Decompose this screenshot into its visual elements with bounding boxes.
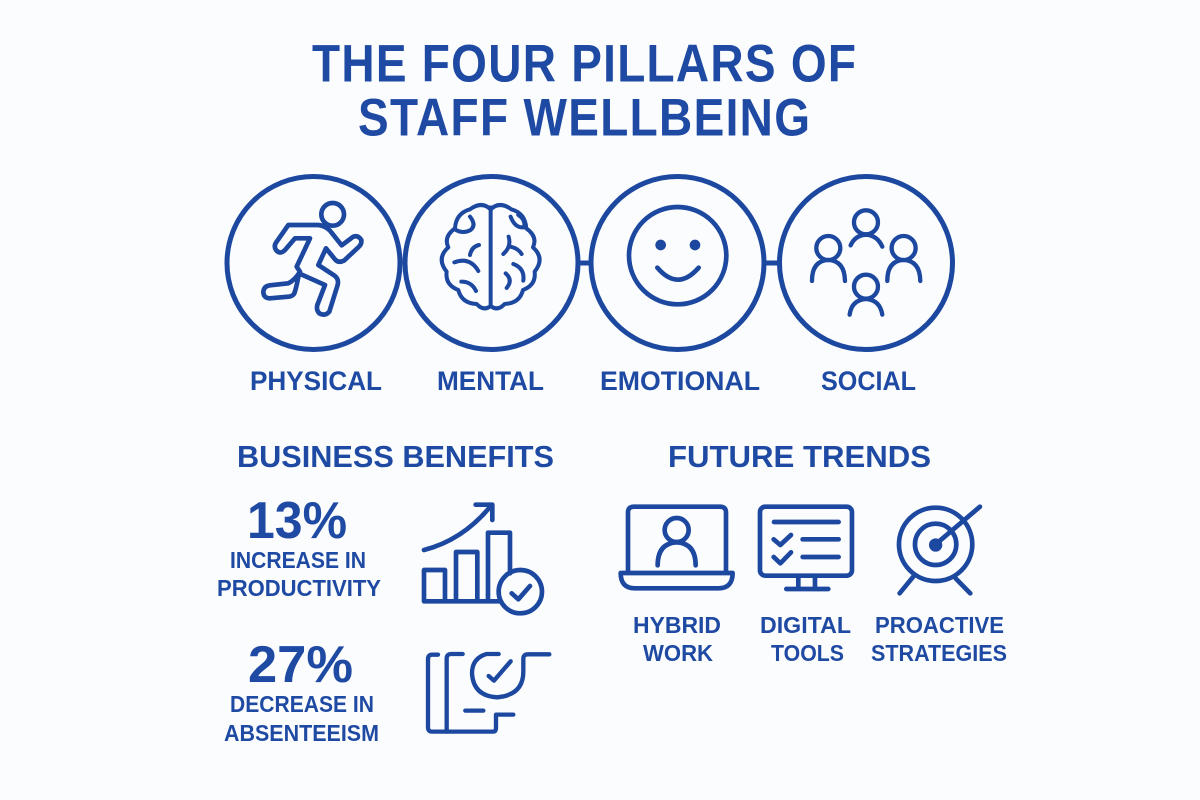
icon: group of people <box>812 210 920 315</box>
stat: absenteeism: DECREASE IN <box>230 691 374 717</box>
heading: business benefits: BUSINESS BENEFITS <box>237 439 554 474</box>
pillar labels: MENTAL <box>437 366 544 396</box>
stat: absenteeism: 27% <box>248 636 353 694</box>
trend label: proactive strategies <box>871 612 1007 666</box>
icon: target with arrow <box>899 507 980 593</box>
stat: absenteeism: ABSENTEEISM <box>224 720 379 746</box>
trend label: hybrid work: HYBRID <box>633 612 721 638</box>
pillar labels: PHYSICAL <box>250 366 382 396</box>
icon: calendar with check <box>428 654 549 732</box>
pillar: emotional <box>591 176 764 350</box>
trend label: hybrid work: WORK <box>643 640 713 666</box>
trend label: hybrid work <box>633 612 721 666</box>
pillar: physical <box>227 176 400 350</box>
trend label: proactive strategies: STRATEGIES <box>871 640 1007 666</box>
trend label: digital tools <box>760 612 851 666</box>
title: THE FOUR PILLARS OF <box>312 33 856 93</box>
stat: productivity: PRODUCTIVITY <box>217 575 381 601</box>
panel: future trends <box>621 439 1007 666</box>
stat: productivity: 13% <box>247 492 347 550</box>
title: STAFF WELLBEING <box>358 87 810 147</box>
trend label: digital tools: TOOLS <box>771 640 844 666</box>
title <box>312 33 856 147</box>
stat: productivity <box>217 492 381 601</box>
icon: smiley face <box>629 207 726 304</box>
icon: laptop with person <box>621 507 733 588</box>
pillar connectors <box>578 260 780 266</box>
icon: monitor with checklist <box>760 507 852 589</box>
stat: productivity: INCREASE IN <box>230 547 366 573</box>
pillar labels <box>250 366 916 396</box>
pillar labels: SOCIAL <box>821 366 916 396</box>
pillar: mental <box>405 176 578 350</box>
pillar: social <box>780 176 952 350</box>
panel: business benefits <box>217 439 554 746</box>
trend label: proactive strategies: PROACTIVE <box>875 612 1004 638</box>
icon: growth bar chart with check <box>424 505 542 613</box>
heading: future trends: FUTURE TRENDS <box>668 439 931 474</box>
icon: brain <box>442 205 540 308</box>
pillar labels: EMOTIONAL <box>600 366 760 396</box>
icon: running person <box>263 203 361 315</box>
stat: absenteeism <box>224 636 379 746</box>
trend label: digital tools: DIGITAL <box>760 612 851 638</box>
